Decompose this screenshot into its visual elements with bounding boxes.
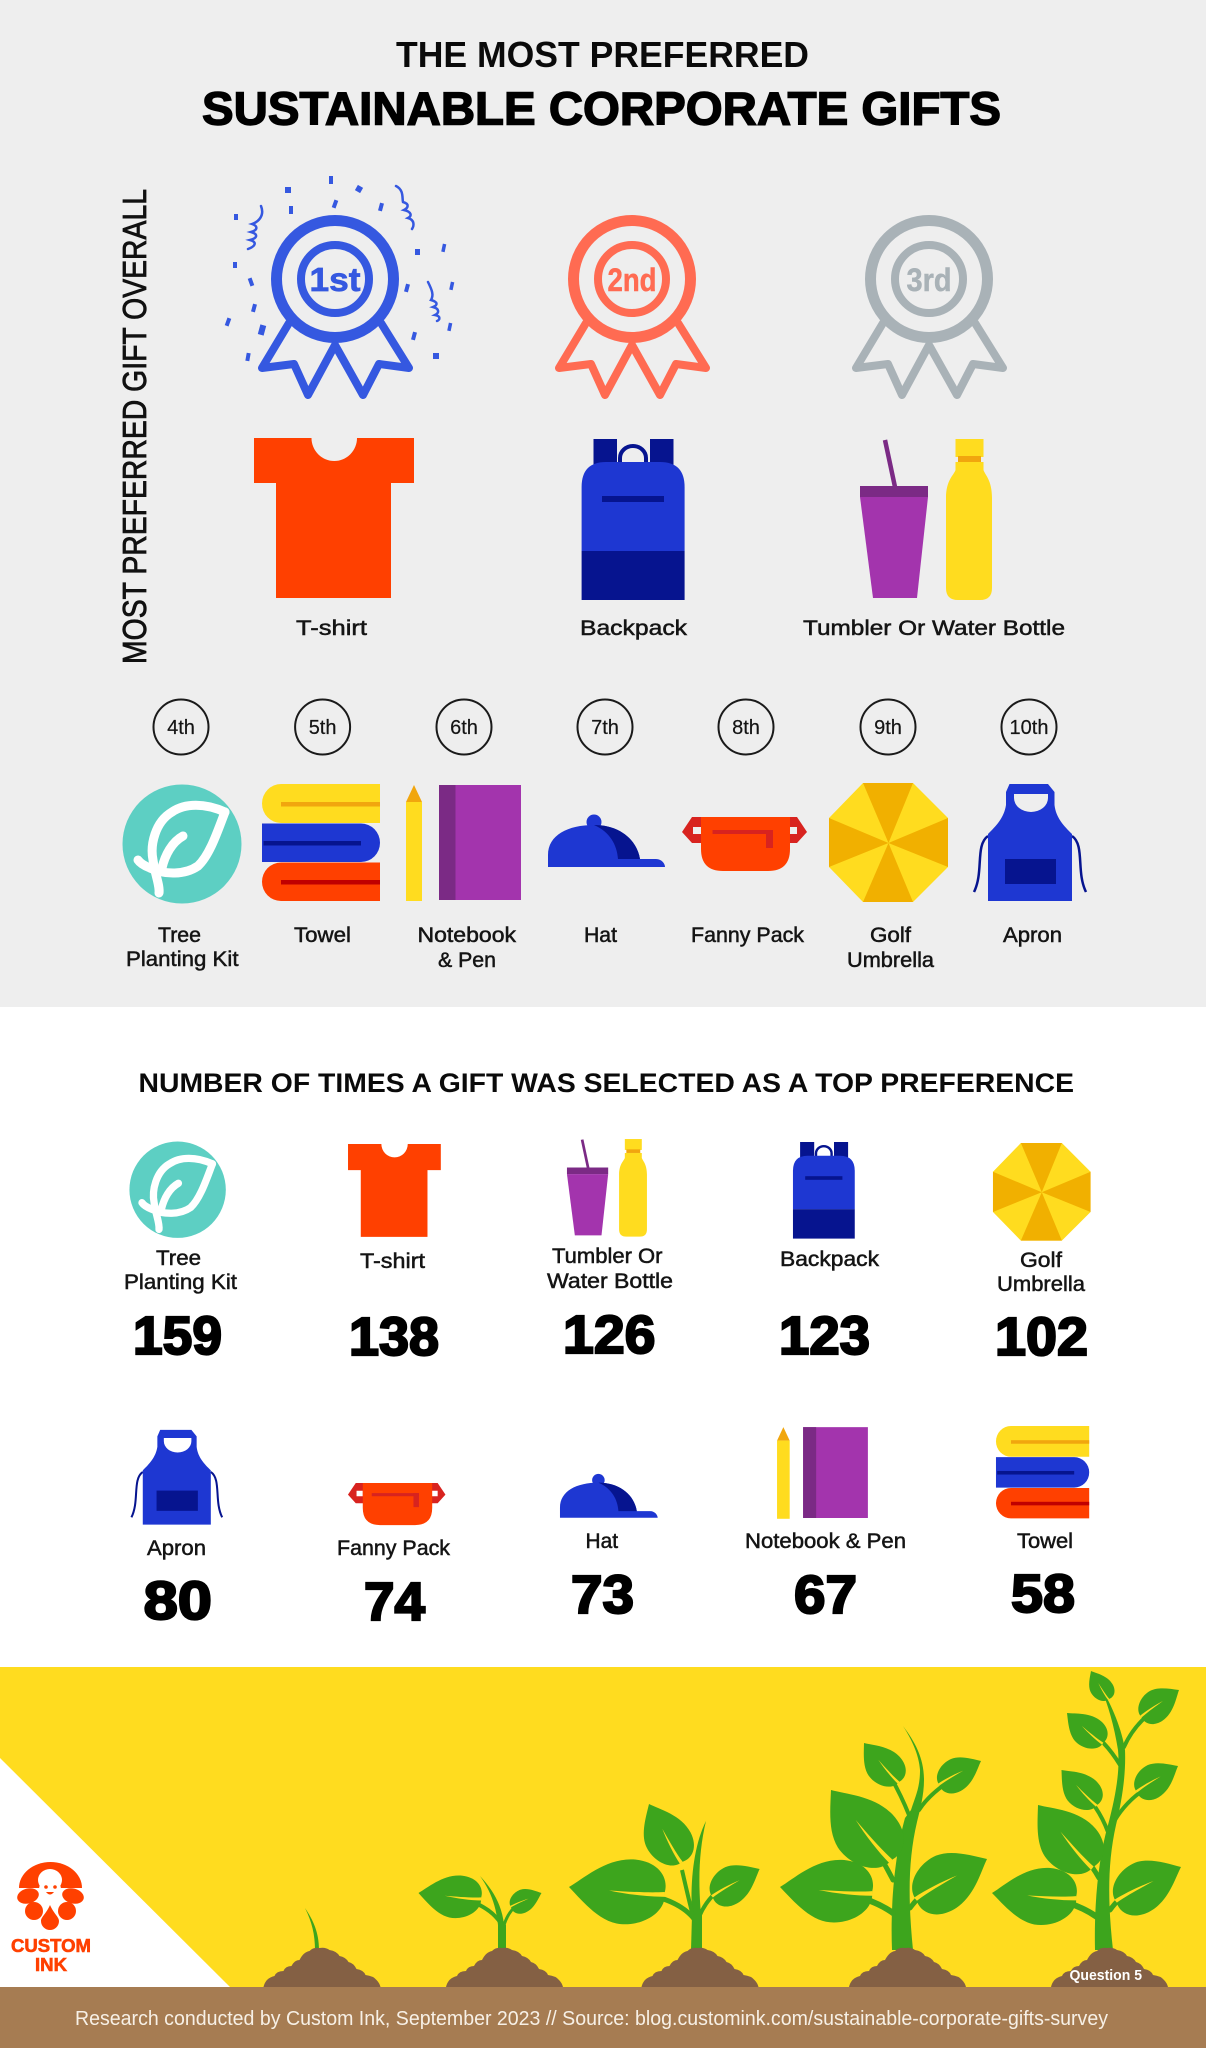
first place medal with confetti — [225, 176, 454, 395]
title — [202, 34, 1001, 134]
Custom Ink logo — [11, 1862, 91, 1975]
stat: notebook and pen 67: Notebook & Pen — [745, 1530, 906, 1553]
rank badges: 4th — [167, 717, 195, 739]
rank labels: Notebook — [418, 924, 517, 947]
rank badges — [154, 700, 1056, 754]
title: THE MOST PREFERRED — [396, 34, 809, 75]
icon: tumbler and bottle — [860, 439, 992, 600]
stat: apron 80 — [131, 1430, 222, 1631]
stat: t-shirt 138: T-shirt — [360, 1250, 425, 1273]
Custom Ink logo: CUSTOM — [11, 1936, 91, 1956]
rank labels: Umbrella — [847, 949, 934, 972]
stat: fanny pack 74 — [337, 1483, 451, 1632]
icon: t-shirt — [254, 438, 414, 598]
stat: tumbler or water bottle 126: Water Bottle — [547, 1270, 673, 1293]
icon: towel — [262, 784, 380, 901]
stat: towel 58 — [996, 1426, 1089, 1624]
question tag: Question 5 — [1070, 1967, 1142, 1984]
plant: leafy plant — [778, 1726, 1001, 1987]
stat: notebook and pen 67: 67 — [794, 1565, 857, 1625]
stat: apron 80: Apron — [147, 1537, 206, 1560]
stat: golf umbrella 102: 102 — [995, 1307, 1088, 1367]
stat: golf umbrella 102 — [993, 1143, 1091, 1367]
rank labels: Tree — [158, 924, 201, 947]
rank badges: 9th — [874, 717, 902, 739]
second place medal — [559, 220, 706, 395]
stat: t-shirt 138 — [348, 1144, 441, 1367]
icon: fanny pack — [682, 817, 807, 871]
rank labels: & Pen — [438, 949, 496, 972]
stat: golf umbrella 102: Umbrella — [997, 1273, 1085, 1296]
rank badges: 8th — [732, 717, 760, 739]
plant: tall plant — [991, 1665, 1193, 1987]
icon: notebook and pen — [406, 785, 521, 901]
stat: tumbler or water bottle 126: 126 — [563, 1305, 656, 1365]
rank badges: 10th — [1010, 717, 1048, 739]
stat: apron 80: 80 — [144, 1571, 212, 1631]
stat: tumbler or water bottle 126: Tumbler Or — [552, 1245, 663, 1268]
stat: backpack 123: 123 — [779, 1306, 870, 1366]
rank labels: Fanny Pack — [691, 924, 805, 947]
white statistics panel — [0, 1007, 1206, 1667]
plant: sprout — [264, 1908, 380, 1987]
label: tumbler or water bottle: Tumbler Or Water Bottle — [803, 617, 1065, 640]
label: t-shirt: T-shirt — [296, 617, 367, 640]
section heading: number of times: NUMBER OF TIMES A GIFT WAS SELECTED AS A TOP PREFERENCE — [138, 1068, 1074, 1098]
stat: tree planting kit 159: Planting Kit — [124, 1271, 237, 1294]
rank badges: 7th — [591, 717, 619, 739]
stat: tree planting kit 159: Tree — [156, 1247, 201, 1270]
rank badges: 5th — [309, 717, 337, 739]
label: backpack: Backpack — [580, 617, 688, 640]
stat: fanny pack 74: Fanny Pack — [337, 1537, 451, 1560]
rank labels: Apron — [1003, 924, 1062, 947]
rank labels — [126, 924, 1062, 972]
stat: notebook and pen 67 — [745, 1427, 906, 1625]
title: SUSTAINABLE CORPORATE GIFTS — [202, 82, 1001, 134]
stat: golf umbrella 102: Golf — [1020, 1249, 1062, 1272]
stat: towel 58: Towel — [1017, 1530, 1073, 1553]
stat: tree planting kit 159: 159 — [133, 1306, 222, 1366]
icon: apron — [974, 784, 1086, 901]
top three gifts — [254, 438, 1065, 640]
rank labels: Golf — [870, 924, 911, 947]
medal text: 1st — [310, 261, 361, 298]
rank labels: Hat — [584, 924, 617, 947]
confetti — [225, 176, 454, 361]
stat: backpack 123: Backpack — [780, 1248, 880, 1271]
medal — [262, 220, 409, 395]
footer source text: Research conducted by Custom Ink, September 2023 // Source: blog.customink.com/sustainable-corporate-gifts-survey — [75, 2008, 1108, 2030]
stat: backpack 123 — [779, 1142, 880, 1366]
ranks four to ten — [122, 700, 1086, 972]
third place medal: 3rd — [906, 262, 952, 298]
stat: hat 73 — [560, 1474, 658, 1625]
plant: seedling — [417, 1872, 563, 1987]
yellow garden panel — [0, 1667, 1206, 1987]
third place medal — [856, 220, 1003, 395]
plant: young plant — [567, 1793, 769, 1987]
icon: tree planting kit — [122, 784, 242, 904]
stat: fanny pack 74: 74 — [364, 1572, 425, 1632]
stat: hat 73: Hat — [586, 1530, 618, 1553]
second place medal: 2nd — [608, 262, 656, 298]
stat: tumbler or water bottle 126 — [547, 1139, 673, 1365]
stat: towel 58: 58 — [1011, 1564, 1075, 1624]
rank labels: Planting Kit — [126, 948, 239, 971]
rank badges: 6th — [450, 717, 478, 739]
rank labels: Towel — [294, 924, 351, 947]
Custom Ink logo: INK — [35, 1955, 67, 1975]
icon: hat — [548, 814, 665, 867]
icon: backpack — [582, 439, 685, 600]
grey top panel — [0, 0, 1206, 1007]
footer band — [0, 1987, 1206, 2048]
side heading: most preferred gift overall: MOST PREFERRED GIFT OVERALL — [116, 189, 153, 664]
icon: golf umbrella — [829, 783, 948, 902]
white logo triangle — [0, 1758, 230, 1987]
stat: hat 73: 73 — [571, 1565, 634, 1625]
streamers — [248, 186, 439, 321]
stat: t-shirt 138: 138 — [349, 1307, 439, 1367]
stat: tree planting kit 159 — [124, 1142, 237, 1366]
